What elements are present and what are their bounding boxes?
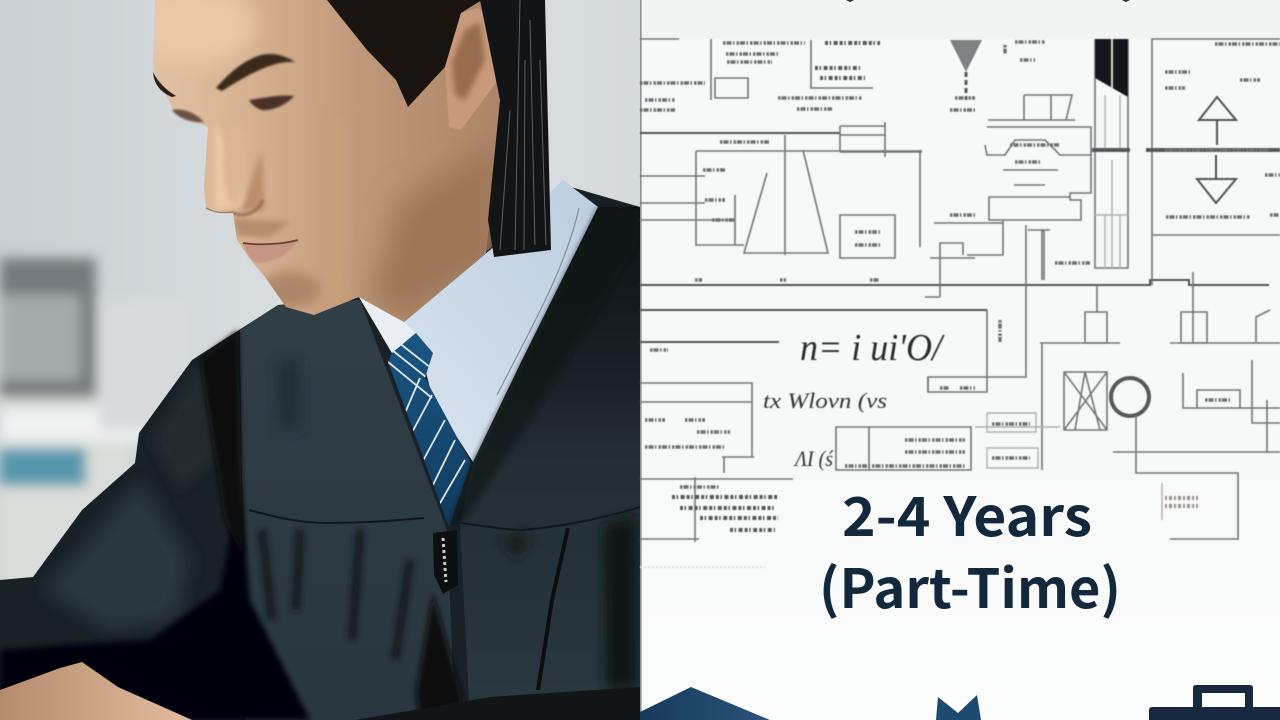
gauge with hatched box — [1064, 360, 1280, 540]
drawing annotations — [640, 42, 1280, 388]
duration text: 2-4 Years (Part-Time): 2-4 Years — [842, 473, 1092, 552]
duration text: 2-4 Years (Part-Time) — [819, 473, 1121, 624]
necktie — [388, 333, 471, 527]
neck and face — [135, 0, 500, 322]
lapel edge — [449, 207, 640, 527]
mortarboard tassel — [480, 0, 551, 257]
blurred office background — [0, 250, 146, 580]
schematic panel — [640, 0, 1280, 720]
icon: house roof — [640, 687, 770, 720]
eyes — [249, 96, 294, 110]
faded note — [1165, 498, 1198, 506]
photo panel: graduate at work — [0, 0, 640, 720]
ear — [445, 8, 498, 130]
icon: briefcase — [1149, 685, 1280, 720]
engineering drawings: ΛΙ (ś — [793, 446, 834, 471]
robe front panels — [45, 207, 640, 720]
duration text: 2-4 Years (Part-Time): (Part-Time) — [819, 545, 1121, 624]
hand — [0, 662, 192, 720]
engineering drawings — [640, 39, 1280, 567]
equation: n= i ui'O/ — [800, 327, 945, 369]
lips — [243, 240, 298, 263]
eyebrows — [216, 54, 295, 91]
icon: graduate gown collar — [936, 695, 981, 720]
dark folds and lower sleeve — [0, 330, 640, 720]
zipper tag — [433, 530, 458, 594]
handwritten annotation: tx Wlovn (vs — [763, 388, 887, 413]
cropped heading remnants — [846, 0, 1130, 2]
lower left block — [640, 383, 793, 542]
shirt and collar — [359, 180, 598, 462]
robe base — [0, 187, 640, 720]
hair — [327, 0, 482, 107]
lower centre blocks — [836, 377, 971, 470]
